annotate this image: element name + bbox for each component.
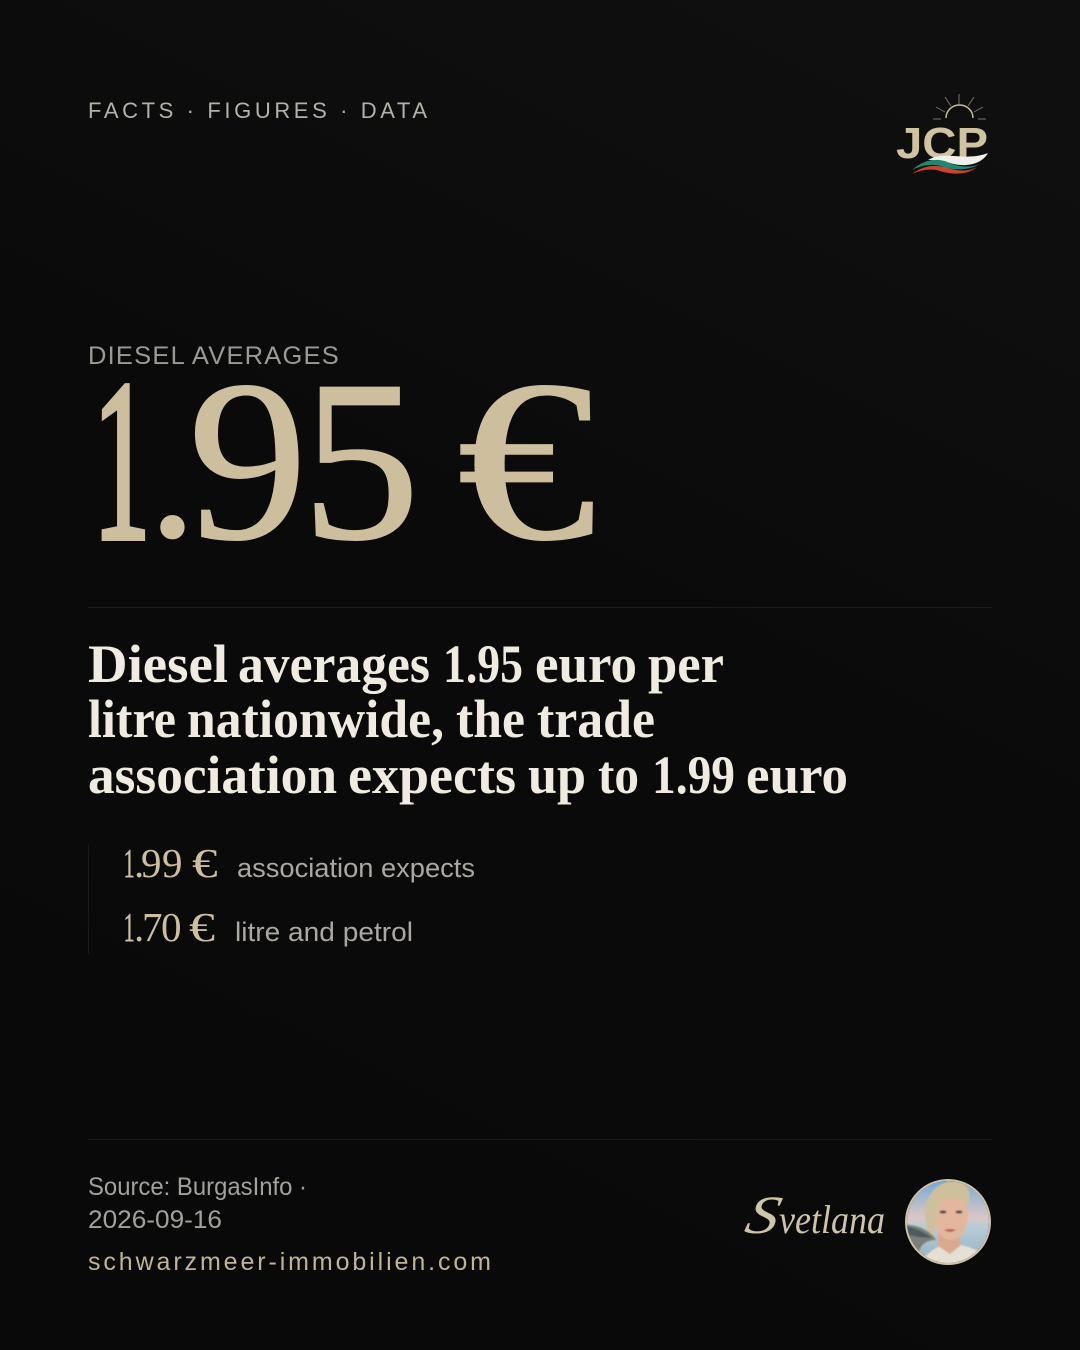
logo letters: JCP — [896, 119, 988, 168]
portrait — [905, 1179, 991, 1265]
portrait ring — [906, 1180, 990, 1264]
headline: Diesel — [88, 634, 228, 694]
headline: litre — [88, 689, 176, 749]
divider top — [88, 607, 992, 608]
headline: euro — [535, 634, 637, 694]
big number: 1.95 euro: 5 — [302, 333, 420, 588]
headline: up — [528, 745, 586, 805]
stat rule — [88, 844, 89, 954]
headline: per — [648, 634, 724, 694]
stat: 1.70 euro litre and petrol — [124, 904, 413, 951]
icon: sun rays — [933, 94, 986, 119]
headline: the — [456, 689, 525, 749]
stat: 1.70 euro litre and petrol: € — [189, 905, 215, 951]
stat: 1.70 euro litre and petrol: litre and petrol — [235, 917, 413, 947]
stat: 1.99 euro association expects: .99 — [134, 840, 182, 886]
headline: 1.99 — [652, 745, 735, 805]
portrait photo — [905, 1179, 991, 1265]
signature: vetlana — [779, 1197, 885, 1242]
stat: 1.70 euro litre and petrol: 1 — [124, 906, 135, 951]
big number: 1.95 euro: € — [457, 334, 596, 588]
headline — [88, 634, 848, 805]
source: Source: BurgasInfo · — [88, 1173, 307, 1201]
stat: 1.70 euro litre and petrol: .70 — [134, 904, 182, 950]
signature: S — [740, 1186, 787, 1246]
stat: 1.99 euro association expects: association expects — [237, 853, 475, 883]
signature — [740, 1186, 885, 1246]
label: diesel averages: DIESEL AVERAGES — [88, 342, 340, 370]
headline: to — [598, 745, 639, 805]
source: 2026-09-16 — [88, 1206, 222, 1234]
source — [88, 1173, 307, 1234]
icon: flag waves — [928, 153, 988, 165]
big number: 1.95 euro — [93, 333, 596, 589]
big number: 1.95 euro: 1 — [93, 334, 151, 589]
headline: averages — [238, 634, 430, 694]
headline: 1.95 — [443, 634, 523, 694]
headline: trade — [537, 689, 655, 749]
headline: euro — [746, 745, 848, 805]
stat: 1.99 euro association expects: € — [192, 842, 218, 887]
headline: association — [88, 745, 337, 805]
stat list — [88, 840, 475, 954]
eyebrow: facts figures data: FACTS · FIGURES · DATA — [88, 98, 427, 123]
divider bottom — [88, 1139, 992, 1140]
stat: 1.99 euro association expects — [124, 840, 475, 887]
headline: expects — [348, 745, 516, 805]
headline: nationwide, — [187, 689, 444, 749]
big number: 1.95 euro: . — [148, 363, 197, 579]
logo: JCP with sun and waves — [896, 94, 988, 174]
big number: 1.95 euro: 9 — [188, 333, 308, 588]
stat: 1.99 euro association expects: 1 — [124, 842, 135, 887]
website: schwarzmeer-immobilien.com — [88, 1248, 491, 1276]
